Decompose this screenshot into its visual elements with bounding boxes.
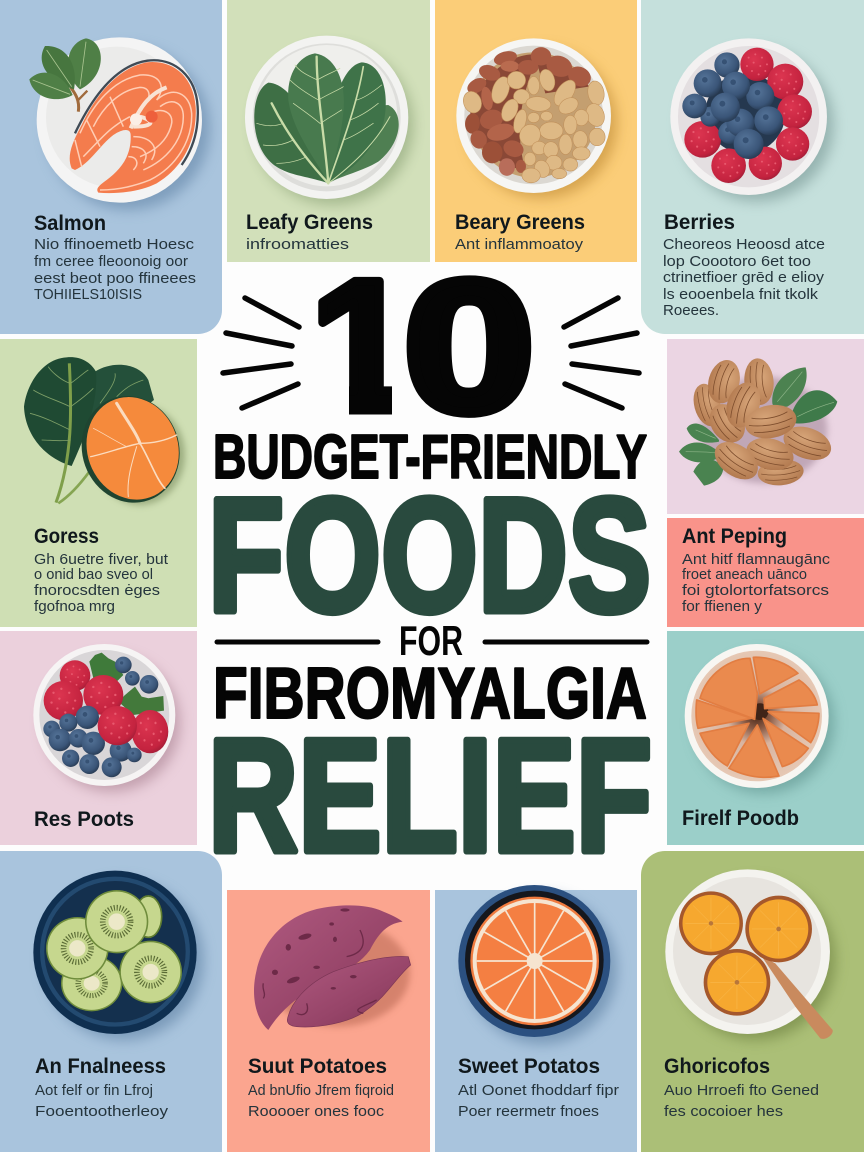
heading: firelf poodb: Firelf Poodb (682, 806, 799, 830)
text: an fnalneess description: Fooentootherleoy (35, 1104, 169, 1120)
text: ant peping description: Ant hitf flamnaugānc (682, 552, 830, 568)
text: salmon description: eest beot poo ffineees (34, 271, 196, 287)
title: foods: FOODS (208, 465, 651, 646)
icon: plate of orange slices with spoon (665, 869, 835, 1040)
panel: almonds image (667, 339, 864, 514)
heading: beary greens: Beary Greens (455, 210, 585, 234)
title: for: FOR (399, 617, 463, 664)
icon: salmon on plate (29, 37, 210, 210)
text: an fnalneess description: Aot felf or fin Lfroj (35, 1083, 153, 1099)
burst lines right (564, 298, 639, 408)
text: salmon description (34, 237, 196, 303)
icon: almonds with leaves (679, 356, 837, 487)
title: budget-friendly: BUDGET-FRIENDLY (213, 423, 647, 492)
text: ghoricofos description (664, 1083, 819, 1120)
text: ant peping description: for ffienen y (682, 599, 763, 615)
text: ghoricofos description: fes cocoioer hes (664, 1104, 783, 1120)
heading: ant peping: Ant Peping (682, 524, 787, 548)
text: salmon description: TOHIIELS10ISIS (34, 287, 142, 303)
icon: leafy greens on plate (245, 36, 413, 205)
text: ant peping description: foi gtolortorfatsorcs (682, 583, 829, 599)
panel: goress (0, 339, 197, 627)
title block (214, 275, 650, 854)
icon: leaf and orange slice (24, 357, 195, 517)
panel: ant peping (667, 518, 864, 627)
icon: bowl of kiwi slices (33, 871, 203, 1040)
text: goress description: o onid bao sveo ol (34, 567, 153, 583)
icon: bowl of sweet potato wedges (685, 644, 834, 793)
panel: leafy greens (227, 0, 430, 262)
icon: bowl of mixed berries (33, 644, 180, 792)
heading: an fnalneess: An Fnalneess (35, 1054, 166, 1078)
title: relief: RELIEF (208, 706, 652, 886)
text: berries description: lop Coootoro 6et too (663, 254, 811, 270)
panel: beary greens (435, 0, 637, 262)
text: goress description (34, 552, 168, 615)
text: suut potatoes description (248, 1083, 394, 1120)
text: berries description: ls eooenbela fnit tkolk (663, 287, 819, 303)
icon: bowl of berries (670, 38, 834, 202)
icon: sweet potatoes (254, 905, 411, 1030)
text: berries description: Cheoreos Heoosd atce (663, 237, 825, 253)
title: 10 (318, 275, 532, 418)
text: berries description: Roeees. (663, 303, 719, 319)
text: beary greens description: Ant inflammoatoy (455, 237, 584, 253)
panel: salmon (0, 0, 222, 334)
divider line left (217, 640, 378, 644)
text: goress description: Gh 6uetre fiver, but (34, 552, 168, 568)
icon: bowl of nuts (456, 38, 617, 198)
text: sweet potatos description: Atl Oonet fhoddarf fipr (458, 1083, 619, 1099)
text: berries description (663, 237, 825, 319)
text: an fnalneess description (35, 1083, 169, 1120)
panel: an fnalneess (0, 851, 222, 1152)
text: ant peping description: froet aneach uānco (682, 567, 807, 583)
panel: firelf poodb (667, 631, 864, 845)
text: salmon description: Nio ffinoemetb Hoesc (34, 237, 194, 253)
heading: suut potatoes: Suut Potatoes (248, 1054, 387, 1078)
text: ant peping description (682, 552, 830, 615)
text: suut potatoes description: Ad bnUfio Jfrem fiqroid (248, 1083, 394, 1099)
panel: res poots (0, 631, 197, 845)
heading: res poots: Res Poots (34, 807, 134, 831)
text: ghoricofos description: Auo Hrroefi fto Gened (664, 1083, 819, 1099)
title: 10: 1 (310, 241, 414, 450)
burst lines left (223, 298, 299, 408)
panel: berries (641, 0, 864, 334)
panel: suut potatoes (227, 890, 430, 1152)
text: berries description: ctrinetfioer grēd e elioy (663, 270, 825, 286)
text: goress description: fgofnoa mrg (34, 599, 115, 615)
title: 10: 0 (404, 242, 535, 451)
heading: salmon: Salmon (34, 211, 106, 235)
title: fibromyalgia: FIBROMYALGIA (213, 654, 647, 734)
divider line right (485, 640, 647, 644)
text: sweet potatos description (458, 1083, 619, 1120)
text: salmon description: fm ceree fleoonoig oor (34, 254, 188, 270)
text: goress description: fnorocsdten ėges (34, 583, 160, 599)
panel: sweet potatos (435, 885, 637, 1152)
icon: bowl with orange slice (458, 885, 617, 1044)
heading: leafy greens: Leafy Greens (246, 210, 373, 234)
text: suut potatoes description: Rooooer ones fooc (248, 1104, 384, 1120)
heading: goress: Goress (34, 524, 99, 548)
heading: sweet potatos: Sweet Potatos (458, 1054, 600, 1078)
text: sweet potatos description: Poer reermetr fnoes (458, 1104, 599, 1120)
heading: berries: Berries (664, 210, 735, 234)
panel: ghoricofos (641, 851, 864, 1152)
heading: ghoricofos: Ghoricofos (664, 1054, 770, 1078)
text: leafy greens description: infroomatties (246, 237, 349, 253)
